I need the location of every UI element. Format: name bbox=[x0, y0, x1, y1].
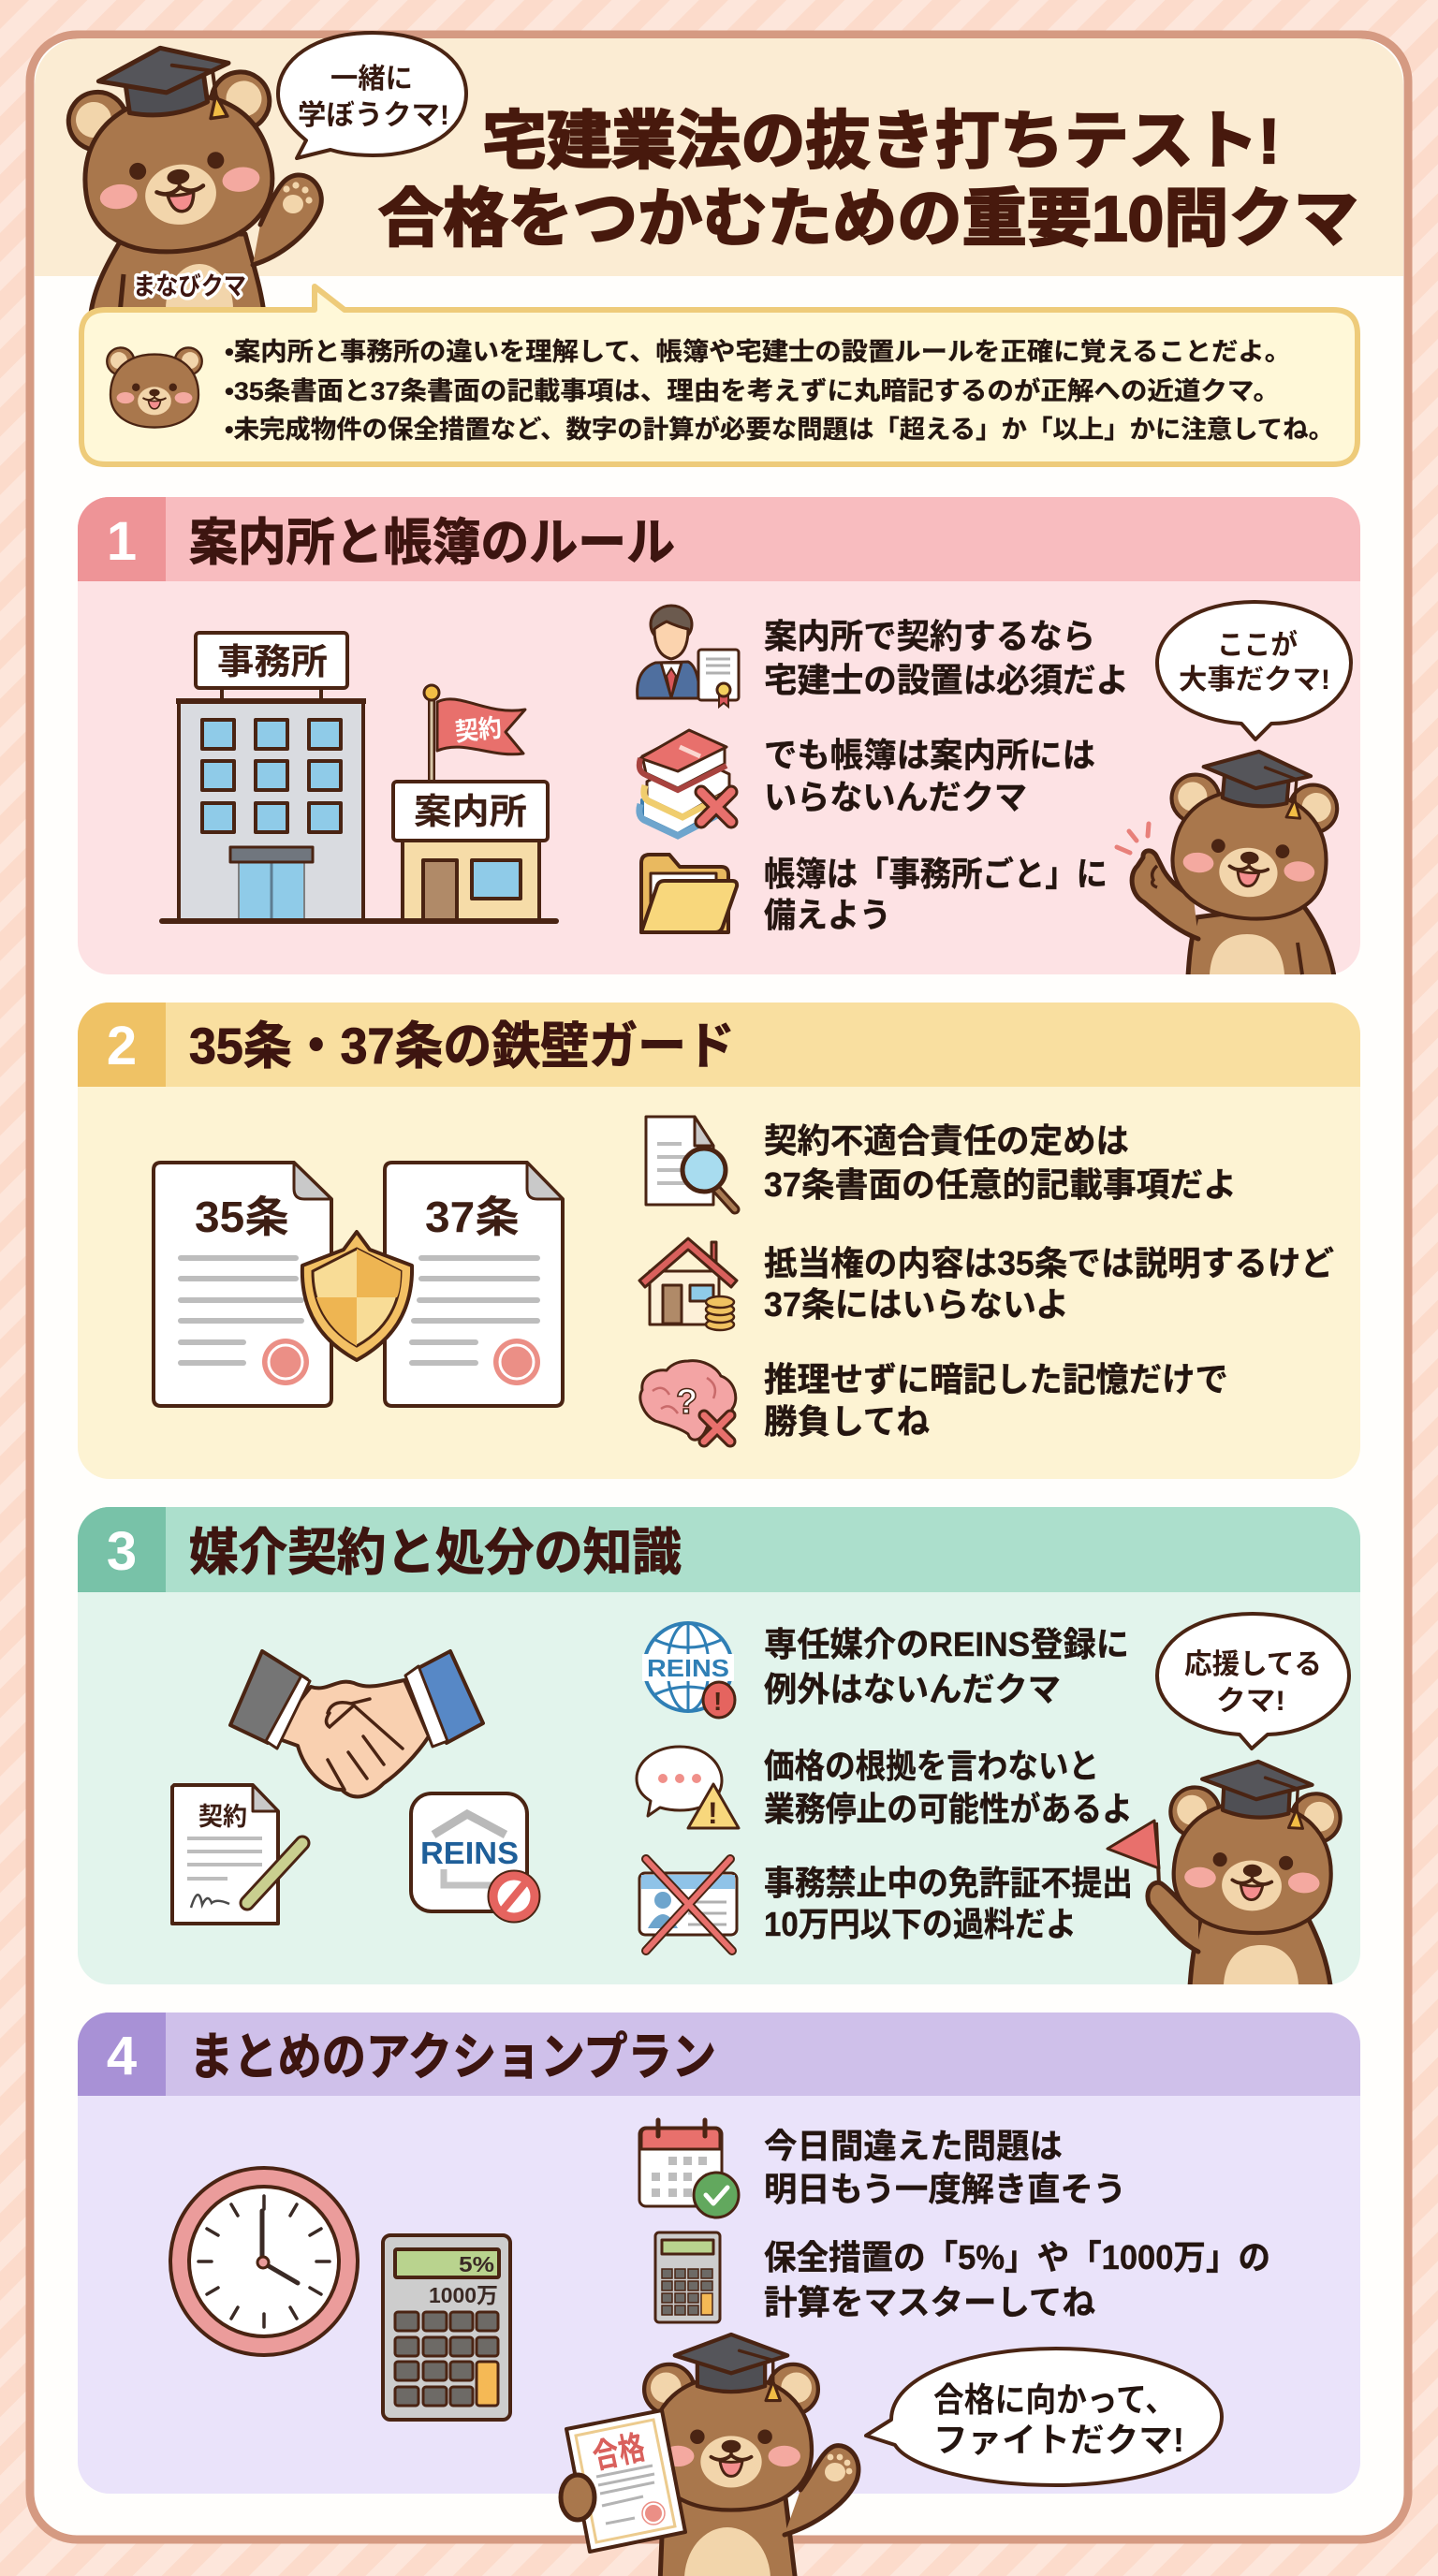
speech bubble: ここが大事だクマ bbox=[1157, 602, 1351, 739]
item 1-1 bbox=[638, 606, 1129, 707]
icon: brain with question bbox=[640, 1361, 736, 1442]
title bbox=[378, 106, 1358, 255]
speech bubble: 応援してるクマ: 応援してる bbox=[1184, 1649, 1322, 1680]
header bar 1 bbox=[78, 497, 1360, 581]
item 2-3: 推理せずに暗記した記憶だけで bbox=[764, 1360, 1228, 1398]
item 2-3: 勝負してね bbox=[764, 1402, 930, 1441]
panel: section 2 bbox=[78, 1003, 1360, 1479]
item 2-1: 37条書面の任意的記載事項だよ bbox=[764, 1165, 1237, 1204]
mascot: manabi bear bbox=[60, 34, 321, 354]
tip text: •35条書面と37条書面の記載事項は、理由を考えずに丸暗記するのが正解への近道クマ。 bbox=[225, 376, 1280, 405]
illustration: clock bbox=[170, 2168, 358, 2355]
item 3-3: 事務禁止中の免許証不提出 bbox=[764, 1864, 1133, 1902]
speech bubble: ここが大事だクマ: 大事だクマ! bbox=[1179, 665, 1330, 695]
icon: globe REINS bbox=[642, 1623, 735, 1718]
icon: brain with question: ? bbox=[676, 1383, 697, 1422]
item 3-1 bbox=[642, 1623, 1129, 1718]
item 3-1: 例外はないんだクマ bbox=[764, 1670, 1061, 1708]
item 1-3 bbox=[641, 855, 1108, 934]
panel: section 3 bbox=[78, 1507, 1360, 2003]
icon: small calculator bbox=[655, 2232, 720, 2322]
header bar 2 bbox=[78, 1003, 1360, 1087]
speech bubble: 合格に向かって: ファイトだクマ! bbox=[933, 2421, 1184, 2459]
speech bubble: 合格に向かって bbox=[866, 2349, 1222, 2485]
speech bubble: ここが大事だクマ: ここが bbox=[1217, 629, 1298, 661]
icon: globe REINS: ! bbox=[713, 1687, 722, 1716]
item 4-2: 保全措置の「5%」や「1000万」の bbox=[764, 2238, 1270, 2276]
header bar 3: 媒介契約と処分の知識 bbox=[189, 1525, 682, 1581]
icon: speech warning bbox=[637, 1747, 739, 1830]
header bar 1: 1 bbox=[107, 511, 137, 572]
item 4-1 bbox=[639, 2120, 1126, 2217]
panel: section 4 bbox=[78, 2012, 1360, 2576]
item 3-3 bbox=[639, 1859, 1133, 1951]
mascot: pointing bear bbox=[1117, 744, 1342, 992]
callout: key points bbox=[81, 286, 1357, 464]
illustration: REINS blocked: REINS bbox=[420, 1836, 519, 1870]
item 1-3: 帳簿は「事務所ごと」に bbox=[764, 855, 1108, 893]
header bar 4: まとめのアクションプラン bbox=[189, 2029, 716, 2086]
icon: small bear head bbox=[107, 347, 202, 428]
icon: crossed license card bbox=[639, 1859, 737, 1951]
icon: house and coins bbox=[639, 1238, 737, 1330]
header band bbox=[35, 38, 1403, 276]
certificate: 合格 bbox=[589, 2427, 649, 2476]
speech bubble: 合格に向かって: 合格に向かって、 bbox=[933, 2380, 1176, 2419]
item 1-1: 宅建士の設置は必須だよ bbox=[764, 661, 1129, 699]
mascot: bear with certificate bbox=[561, 2334, 858, 2576]
tip text: •未完成物件の保全措置など、数字の計算が必要な問題は「超える」か「以上」かに注意してね。 bbox=[225, 415, 1334, 444]
item 1-3: 備えよう bbox=[764, 896, 891, 934]
certificate bbox=[566, 2410, 685, 2552]
item 2-2: 抵当権の内容は35条では説明するけど bbox=[764, 1244, 1334, 1282]
item 3-2 bbox=[637, 1747, 1133, 1830]
mascot: bear with flag bbox=[1108, 1757, 1343, 2003]
illustration: calculator bbox=[383, 2235, 510, 2420]
icon: folder bbox=[641, 855, 737, 932]
item 2-1 bbox=[646, 1117, 1237, 1209]
item 4-1: 今日間違えた問題は bbox=[764, 2127, 1063, 2165]
item 3-2: 業務停止の可能性があるよ bbox=[764, 1790, 1133, 1828]
illustration: handshake bbox=[230, 1651, 483, 1796]
header bar 2: 35条・37条の鉄壁ガード bbox=[189, 1018, 735, 1075]
title: 宅建業法の抜き打ちテスト! bbox=[482, 106, 1280, 177]
illustration: calculator: 1000万 bbox=[429, 2283, 498, 2307]
tip text: •案内所と事務所の違いを理解して、帳簿や宅建士の設置ルールを正確に覚えることだよ。 bbox=[225, 338, 1291, 366]
speech bubble: 一緒に学ぼうクマ bbox=[278, 33, 466, 158]
icon: calendar check bbox=[639, 2120, 739, 2217]
speech bubble: 一緒に学ぼうクマ: 学ぼうクマ! bbox=[298, 100, 449, 131]
icon: ledgers crossed out bbox=[639, 730, 731, 836]
item 3-3: 10万円以下の過料だよ bbox=[764, 1905, 1077, 1943]
header bar 4 bbox=[78, 2012, 1360, 2096]
header bar 3: 3 bbox=[107, 1521, 137, 1582]
item 3-2: 価格の根拠を言わないと bbox=[764, 1747, 1099, 1785]
item 1-2 bbox=[639, 730, 1095, 836]
item 4-2 bbox=[655, 2232, 1270, 2322]
illustration: documents and shield: 37条 bbox=[425, 1193, 520, 1241]
illustration: documents and shield bbox=[154, 1163, 563, 1406]
header bar 1: 案内所と帳簿のルール bbox=[189, 515, 675, 571]
item 2-2: 37条にはいらないよ bbox=[764, 1285, 1069, 1324]
illustration: office and branch bbox=[162, 633, 556, 921]
item 4-1: 明日もう一度解き直そう bbox=[764, 2170, 1126, 2208]
item 1-1: 案内所で契約するなら bbox=[764, 617, 1095, 655]
item 2-1: 契約不適合責任の定めは bbox=[764, 1121, 1129, 1160]
illustration: contract: 契約 bbox=[198, 1803, 247, 1831]
item 2-2 bbox=[639, 1238, 1334, 1330]
speech bubble: 一緒に学ぼうクマ: 一緒に bbox=[330, 64, 413, 95]
item 2-3 bbox=[640, 1360, 1228, 1442]
name label: まなびクマ bbox=[133, 272, 246, 300]
illustration: office and branch: 契約 bbox=[454, 713, 503, 746]
item 4-2: 計算をマスターしてね bbox=[764, 2283, 1095, 2321]
item 3-1: 専任媒介のREINS登録に bbox=[764, 1625, 1129, 1663]
item 1-2: いらないんだクマ bbox=[764, 778, 1027, 816]
speech bubble: 応援してるクマ bbox=[1157, 1614, 1349, 1749]
item 1-2: でも帳簿は案内所には bbox=[764, 736, 1095, 774]
illustration: office and branch: 案内所 bbox=[414, 793, 527, 832]
icon: globe REINS: REINS bbox=[647, 1654, 729, 1682]
illustration: REINS blocked bbox=[411, 1793, 539, 1922]
header bar 2: 2 bbox=[107, 1016, 137, 1076]
speech bubble: 応援してるクマ: クマ! bbox=[1216, 1686, 1285, 1717]
illustration: contract bbox=[172, 1785, 302, 1924]
illustration: calculator: 5% bbox=[459, 2252, 494, 2276]
illustration: office and branch: 事務所 bbox=[217, 643, 328, 682]
panel: section 1 bbox=[78, 497, 1360, 992]
illustration: documents and shield: 35条 bbox=[195, 1193, 289, 1241]
header bar 3 bbox=[78, 1507, 1360, 1592]
title: 合格をつかむための重要10問クマ bbox=[378, 183, 1358, 255]
icon: speech warning: ! bbox=[708, 1796, 718, 1830]
tip text bbox=[225, 338, 1334, 444]
header bar 4: 4 bbox=[107, 2026, 137, 2086]
icon: licensed agent bbox=[638, 606, 739, 707]
icon: document magnifier bbox=[646, 1117, 735, 1209]
